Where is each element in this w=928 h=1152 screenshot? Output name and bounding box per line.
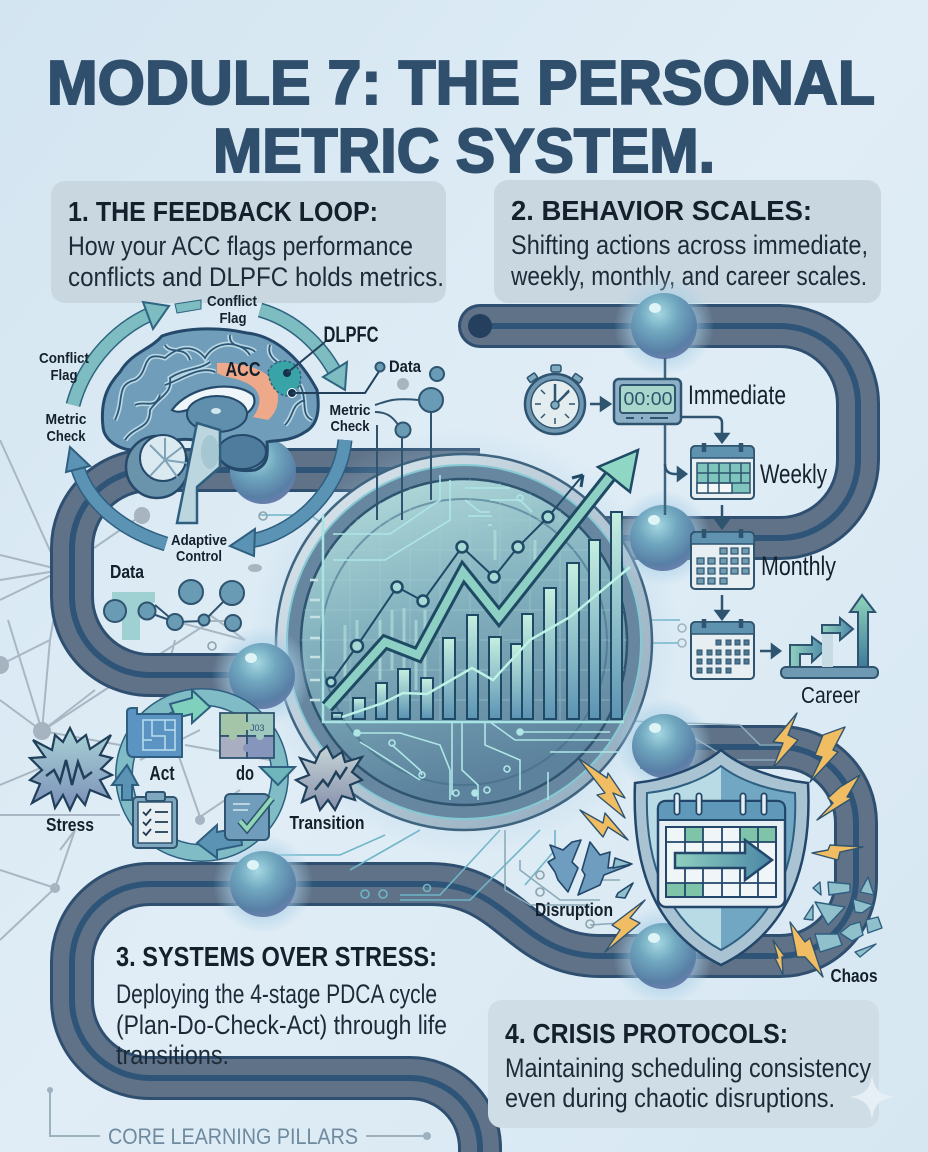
cycle labels: Act bbox=[150, 763, 175, 785]
panel: systems over stress text: transitions. bbox=[116, 1040, 229, 1070]
panel: feedback loop diagram bbox=[39, 293, 444, 640]
icon: chaos fragments bbox=[804, 877, 882, 957]
panel: crisis protocols text: 4. CRISIS PROTOCOLS: bbox=[505, 1018, 788, 1049]
glow behind central dial bbox=[249, 427, 679, 857]
schedule arrow bbox=[675, 840, 772, 880]
digital timer icon: 00:00 bbox=[624, 389, 672, 409]
icon: clipboard bbox=[133, 792, 177, 848]
data nodes left bbox=[104, 580, 244, 640]
panel: behavior scales text: 2. BEHAVIOR SCALES: bbox=[511, 195, 812, 226]
loop labels: Conflict bbox=[207, 293, 257, 310]
brain illustration bbox=[102, 329, 380, 523]
panel: systems over stress text: Deploying the 4-stage PDCA cycle bbox=[116, 979, 437, 1009]
brain folds bbox=[115, 335, 312, 440]
loop labels bbox=[39, 293, 421, 582]
panel: crisis protocols diagram bbox=[535, 713, 882, 986]
calendar inside shield bbox=[658, 801, 785, 907]
icon: blueprint bbox=[127, 708, 182, 757]
panel: systems over stress text: 3. SYSTEMS OVER STRESS: bbox=[116, 941, 437, 972]
icon: puzzle bbox=[220, 713, 274, 758]
label chaos: Chaos bbox=[830, 966, 878, 986]
title: MODULE 7: THE PERSONAL bbox=[47, 49, 875, 118]
panel: PDCA cycle bbox=[112, 690, 295, 858]
cycle ring bbox=[124, 697, 280, 853]
panel: behavior scales text: weekly, monthly, and career scales. bbox=[510, 261, 867, 291]
loop labels: Flag bbox=[220, 310, 246, 327]
chart axes bbox=[323, 514, 624, 722]
connector line bbox=[664, 358, 666, 515]
weekly calendar icon bbox=[691, 443, 754, 499]
icon: puzzle: J03 bbox=[250, 723, 265, 733]
bar chart bbox=[332, 512, 622, 719]
icon: sparkle bbox=[849, 1075, 895, 1120]
footer label: CORE LEARNING PILLARS bbox=[108, 1124, 358, 1149]
data nodes right bbox=[375, 362, 444, 520]
cycle labels: do bbox=[236, 763, 254, 785]
small grey dots bbox=[134, 507, 262, 572]
label career: Career bbox=[801, 682, 860, 708]
title: METRIC SYSTEM. bbox=[213, 117, 715, 186]
ACC region bbox=[217, 363, 278, 420]
career steps icon bbox=[781, 595, 878, 678]
icon: stress burst bbox=[30, 728, 112, 810]
arrow bbox=[760, 645, 780, 657]
loop labels: Conflict bbox=[39, 350, 89, 367]
brain stem bbox=[177, 423, 220, 523]
arrow bbox=[716, 505, 728, 528]
icon: shield bbox=[635, 750, 808, 965]
loop labels: Adaptive bbox=[171, 532, 227, 549]
label transition: Transition bbox=[290, 813, 364, 833]
sphere: road nodes bbox=[212, 276, 714, 1006]
loop labels: Metric bbox=[330, 402, 370, 419]
main growth arrow bbox=[327, 450, 638, 707]
footer label bbox=[47, 1087, 431, 1149]
panel: behavior scales diagram bbox=[525, 358, 878, 708]
loop labels: Data bbox=[389, 357, 421, 376]
cycle arrowheads bbox=[112, 690, 295, 858]
icon: transition burst bbox=[296, 746, 362, 810]
loop labels: Data bbox=[110, 562, 145, 582]
stopwatch icon bbox=[525, 365, 585, 434]
dial grid bbox=[300, 470, 640, 720]
panel: systems over stress text bbox=[116, 941, 447, 1070]
arrow bbox=[681, 417, 728, 442]
digital timer icon bbox=[614, 379, 681, 424]
loop arrows bbox=[66, 300, 347, 556]
title bbox=[47, 49, 875, 186]
label disruption: Disruption bbox=[535, 900, 613, 920]
thalamus bbox=[187, 396, 247, 432]
loop labels: Check bbox=[46, 428, 86, 445]
pons bbox=[218, 435, 266, 469]
loop labels: DLPFC bbox=[324, 322, 379, 347]
road: connecting pathway bbox=[72, 314, 858, 1152]
arrow bbox=[590, 398, 610, 410]
loop labels: ACC bbox=[226, 359, 260, 381]
panel: crisis protocols text bbox=[488, 1000, 879, 1128]
loop labels: Control bbox=[176, 548, 222, 565]
light trend line bbox=[342, 567, 630, 717]
loop labels: Flag bbox=[50, 367, 78, 384]
panel: behavior scales text bbox=[494, 180, 881, 303]
career calendar icon bbox=[691, 619, 754, 679]
panel: crisis protocols text: Maintaining scheduling consistency bbox=[505, 1053, 871, 1083]
scale ticks bbox=[310, 580, 320, 700]
circuit traces bbox=[208, 512, 790, 928]
icon: disruption shards bbox=[548, 840, 633, 898]
panel: behavior scales text: Shifting actions across immediate, bbox=[511, 230, 868, 260]
loop labels: Check bbox=[330, 418, 370, 435]
label weekly: Weekly bbox=[760, 459, 827, 489]
label immediate: Immediate bbox=[688, 380, 786, 410]
icon: lightning bolts bbox=[578, 713, 863, 977]
corpus callosum bbox=[172, 387, 255, 418]
panel: feedback loop text: How your ACC flags performance bbox=[68, 231, 413, 261]
DLPFC region bbox=[268, 361, 301, 396]
dial circuit lines bbox=[333, 475, 620, 800]
cerebellum bbox=[126, 436, 188, 498]
label stress: Stress bbox=[46, 815, 94, 835]
arrow bbox=[665, 464, 686, 480]
icon: check document bbox=[225, 794, 272, 840]
background network bbox=[0, 440, 270, 940]
faint background bars bbox=[345, 530, 535, 690]
panel: systems over stress text: (Plan-Do-Check-Act) through life bbox=[116, 1010, 447, 1040]
cycle labels bbox=[150, 763, 254, 785]
node trend line bbox=[326, 475, 583, 686]
central chart dial bbox=[276, 450, 652, 830]
label monthly: Monthly bbox=[761, 551, 836, 581]
cerebrum bbox=[102, 329, 318, 471]
arrow bbox=[716, 595, 728, 619]
panel: feedback loop text: 1. THE FEEDBACK LOOP: bbox=[68, 196, 378, 227]
loop labels: Metric bbox=[46, 411, 86, 428]
panel: feedback loop text: conflicts and DLPFC holds metrics. bbox=[68, 262, 444, 292]
monthly calendar icon bbox=[691, 529, 754, 589]
panel: crisis protocols text: even during chaotic disruptions. bbox=[505, 1083, 835, 1113]
panel: feedback loop text bbox=[51, 181, 446, 303]
